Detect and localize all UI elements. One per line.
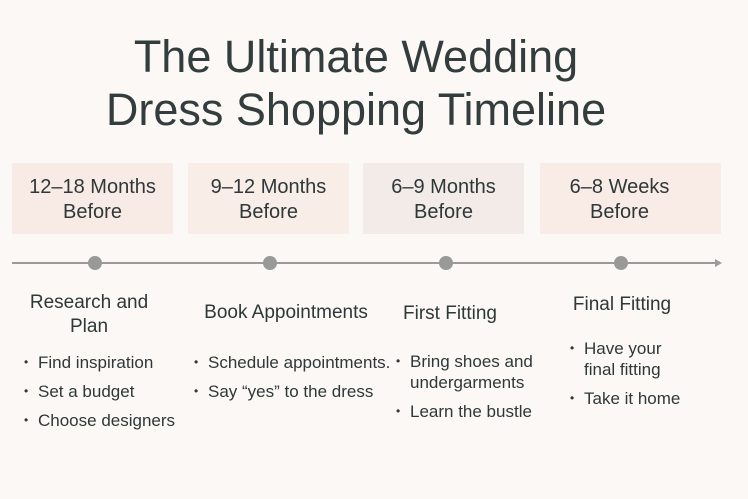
heading: research and plan: Plan (70, 316, 108, 337)
title: Dress Shopping Timeline (106, 84, 606, 135)
list 2 (194, 353, 390, 401)
heading: research and plan (30, 292, 148, 337)
panel: 9-12 months: 9–12 Months (211, 176, 326, 198)
panel: 6-9 months (363, 163, 524, 234)
list 1: Set a budget (38, 382, 134, 401)
panel: 12-18 months (12, 163, 173, 234)
panel: 12-18 months: Before (63, 201, 122, 223)
list 1: Choose designers (38, 411, 175, 430)
heading: final fitting: Final Fitting (573, 294, 671, 315)
heading: research and plan: Research and (30, 292, 148, 313)
list 2: Schedule appointments. (208, 353, 390, 372)
timeline arrow (12, 259, 722, 267)
list 4: Have your (584, 339, 661, 358)
dot 4 (614, 256, 628, 270)
dot 3 (439, 256, 453, 270)
panel: 9-12 months: Before (239, 201, 298, 223)
panel: 9-12 months (188, 163, 349, 234)
panel: 12-18 months: 12–18 Months (29, 176, 156, 198)
dot 2 (263, 256, 277, 270)
panel: 6-8 weeks (540, 163, 721, 234)
panel: 6-8 weeks: Before (590, 201, 649, 223)
list 3: Bring shoes and (410, 352, 533, 371)
list 3: Learn the bustle (410, 402, 532, 421)
heading: first fitting: First Fitting (403, 303, 497, 324)
list 4: Take it home (584, 389, 680, 408)
panel: 6-9 months: 6–9 Months (391, 176, 496, 198)
list 3 (396, 352, 533, 421)
list 4 (570, 339, 680, 408)
panel: 6-8 weeks: 6–8 Weeks (570, 176, 669, 198)
title (106, 31, 606, 135)
panel: 6-9 months: Before (414, 201, 473, 223)
title: The Ultimate Wedding (134, 31, 578, 82)
list 3: undergarments (410, 373, 524, 392)
list 2: Say “yes” to the dress (208, 382, 373, 401)
list 1: Find inspiration (38, 353, 153, 372)
dot 1 (88, 256, 102, 270)
list 4: final fitting (584, 360, 661, 379)
list 1 (24, 353, 175, 430)
heading: book appointments: Book Appointments (204, 302, 368, 323)
